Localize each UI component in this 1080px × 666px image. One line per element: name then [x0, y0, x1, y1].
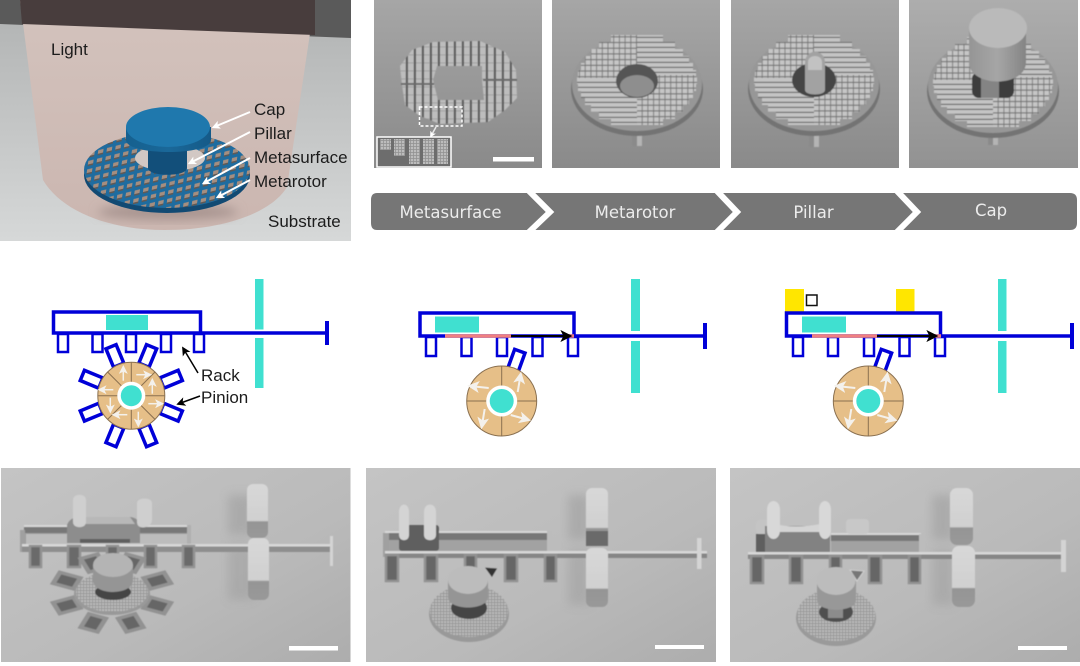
micrograph: pillar on metarotor: [731, 0, 899, 168]
pinion: [80, 345, 182, 447]
displacement track and arrow: [445, 334, 574, 338]
label: Light: Light: [51, 40, 88, 59]
label: Rack: Rack: [201, 366, 240, 385]
arrow: pillar: [190, 132, 250, 163]
panel: 3D render of metarotor under light: [0, 0, 351, 241]
arrow: pinion callout: [178, 396, 200, 404]
arrow: rack callout: [183, 348, 198, 373]
schematic: rack and pinion, eight tooth pinion: [54, 279, 327, 447]
arrow: metarotor: [218, 180, 250, 197]
label: Metarotor: Metarotor: [254, 172, 327, 191]
teal electrode posts: [106, 279, 264, 388]
arrow: metasurface: [204, 158, 250, 183]
label: Metasurface: Metasurface: [254, 148, 348, 167]
scale bar: [289, 646, 338, 650]
process flow: chevron bar: [371, 191, 1077, 232]
metarotor disc with metasurface: [84, 132, 250, 213]
yellow blocks: [785, 289, 914, 312]
light beam cone: [20, 0, 315, 230]
teal electrode posts: [802, 279, 1006, 393]
arrow: cap: [214, 112, 250, 127]
micrograph: fabricated device, engaged pinion: [366, 468, 716, 662]
micrograph: metarotor: [552, 0, 720, 168]
scale bar: [655, 645, 704, 649]
small black square: [806, 295, 817, 306]
pillar: [148, 148, 187, 175]
displacement track and arrow: [812, 334, 941, 338]
rack: [420, 313, 705, 356]
dashed selection box: [420, 107, 462, 126]
label: Cap: Cap: [254, 100, 285, 119]
label: Substrate: Substrate: [268, 212, 341, 231]
inset zoom: [377, 137, 451, 167]
step: Metasurface: Metasurface: [400, 203, 501, 222]
micrograph: cap on metarotor: [909, 0, 1078, 168]
label: Pinion: Pinion: [201, 388, 248, 407]
scale bar: [1018, 646, 1067, 650]
rack: [786, 313, 1072, 356]
schematic: rack and pinion with yellow blocks and cap: [785, 279, 1072, 436]
cap: [126, 107, 211, 152]
micrograph: fabricated device with cap block: [730, 468, 1080, 662]
micrograph: fabricated device, toothed pinion: [1, 468, 350, 662]
scale bar: [493, 157, 534, 162]
teal electrode posts: [435, 279, 640, 393]
rack: [54, 312, 327, 352]
step: Pillar: Pillar: [793, 203, 834, 222]
pinion: [467, 349, 537, 436]
step: Cap: Cap: [975, 201, 1007, 220]
schematic: rack and pinion, one tooth, rack advanced: [420, 279, 705, 436]
step: Metarotor: Metarotor: [595, 203, 676, 222]
arrow: selection to inset: [431, 127, 436, 136]
micrograph: metasurface ring: [374, 0, 542, 168]
pinion: [833, 349, 903, 436]
label: Pillar: Pillar: [254, 124, 292, 143]
